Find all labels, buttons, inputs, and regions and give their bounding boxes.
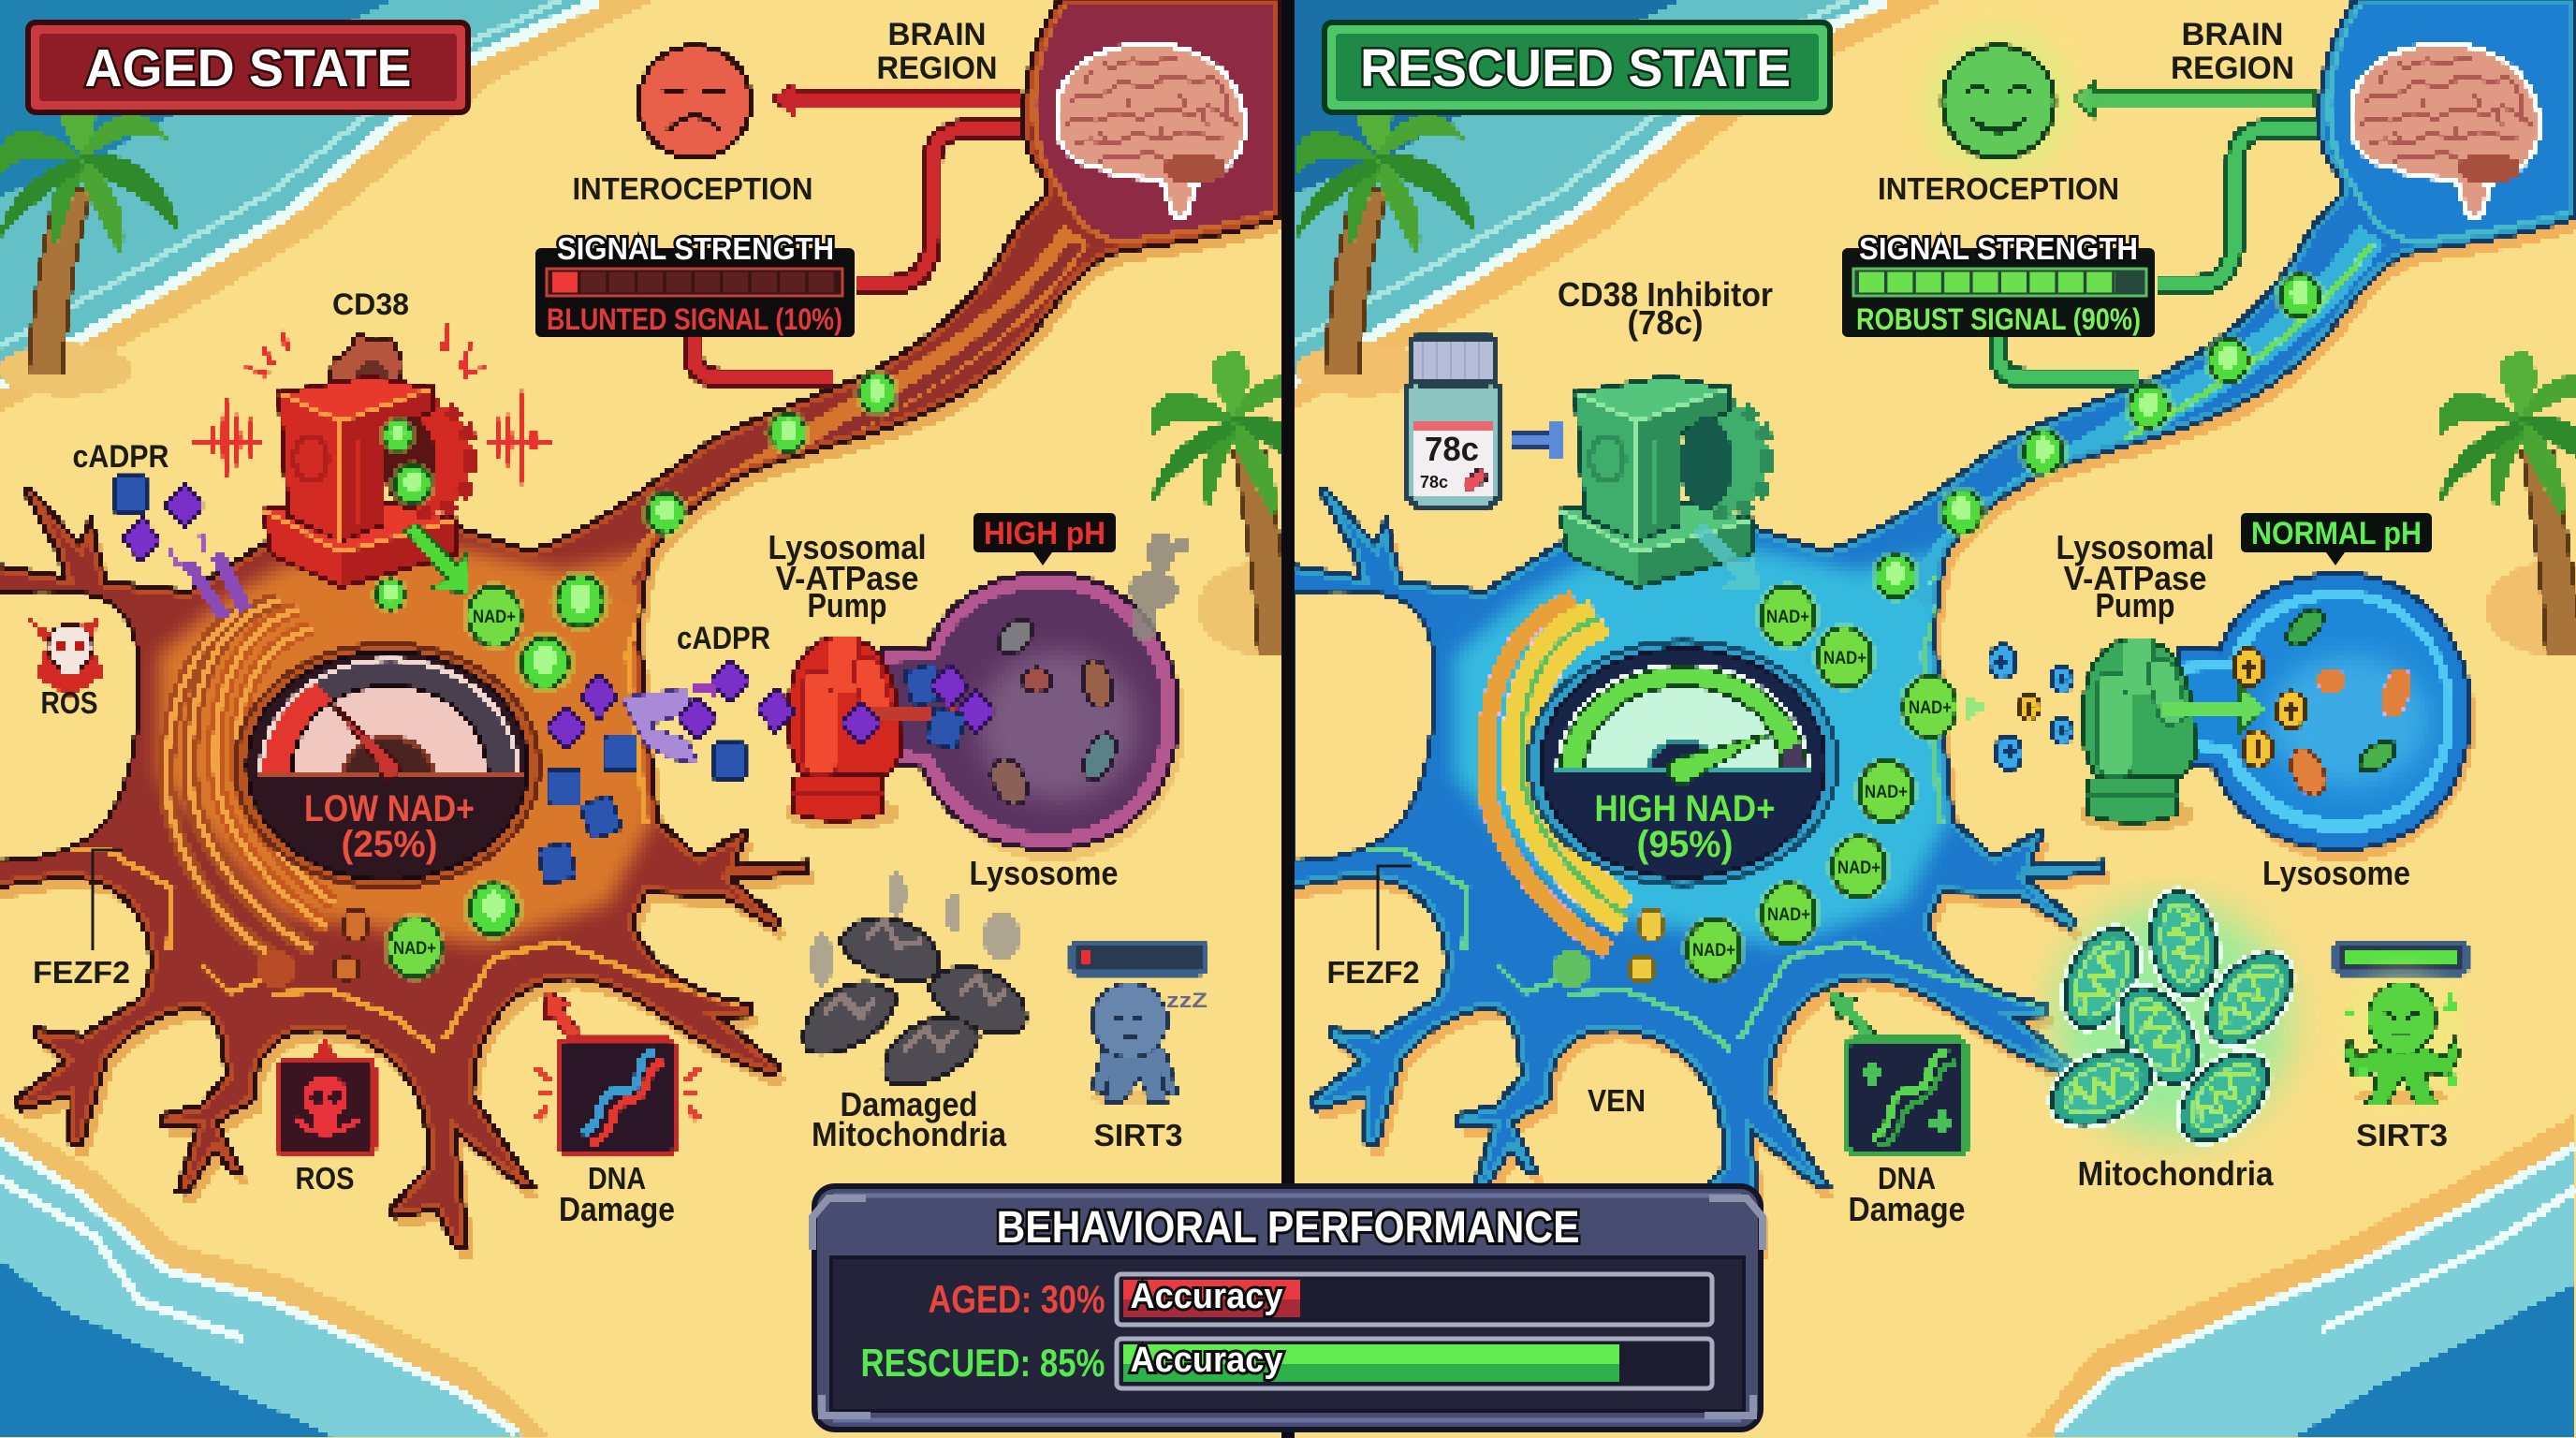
NAD+ molecules: rescued: NAD+ [1767,905,1810,925]
label: lysosomal V-ATPase pump rescued [2056,528,2215,624]
label: CD38 inhibitor: (78c) [1627,303,1704,342]
icon: 78c bottle [1407,337,1500,506]
label: damaged mitochondria: Damaged [841,1085,977,1123]
row: rescued accuracy: RESCUED: 85% [861,1341,1105,1385]
arrow: DNA damage increase [545,990,582,1041]
label: cADPR middle: cADPR [677,621,770,656]
icon: ROS box [278,1037,374,1154]
label: DNA damage rescued [1848,1161,1966,1228]
neuron: rescued [1286,0,2576,1260]
ocean: bottom left shore [0,1114,552,1438]
NAD+ molecules: rescued: NAD+ [1909,698,1952,718]
panel: aged state [0,0,1330,1438]
icons: damaged mitochondria [789,872,1039,1094]
label: lysosomal V-ATPase pump: Pump [807,586,887,624]
NAD+ molecules: aged: NAD+ [393,939,436,959]
icon: inhibition bar [1512,422,1563,459]
label: FEZF2 rescued: FEZF2 [1327,955,1419,990]
center divider [1281,0,1295,1438]
icon: DNA repaired box [1848,1039,1966,1154]
icon: DNA damage box [537,1039,697,1154]
icon: brain rescued [2350,44,2539,218]
label: ROS upper: ROS [41,685,97,720]
label: lysosomal V-ATPase pump rescued: Lysosomal [2056,528,2215,566]
arrow: CD38 consuming NAD [404,524,468,594]
callout: high pH: HIGH pH [984,516,1105,551]
label: low NAD+: LOW NAD+ [304,788,475,829]
palm tree: right rescued [2438,353,2576,655]
icons: cADPR molecules and channel [537,658,994,884]
icon: CD38 enzyme machine [263,334,472,587]
NAD+ molecules: rescued: NAD+ [1823,649,1866,668]
arrow: brain to interoception rescued [2072,82,2315,118]
label: FEZF2: FEZF2 [33,955,130,990]
row: rescued accuracy [861,1339,1712,1388]
icon: ROS skull upper [28,618,105,697]
NAD+ molecules: aged: NAD+ [473,608,516,627]
icon: strong SIRT3 [2344,972,2460,1107]
label: mitochondria: Mitochondria [2078,1154,2274,1193]
label: FEZF2 [33,850,130,990]
pump: lysosomal V-ATPase aged [784,637,900,829]
motion lines: CD38 [193,323,554,486]
gauge: low NAD+ [236,644,539,888]
label: DNA damage aged [559,1161,675,1228]
label: 25 percent: (25%) [341,824,438,865]
label: lysosomal V-ATPase pump [768,528,927,624]
label: cADPR upper: cADPR [73,439,168,475]
label: FEZF2 rescued [1327,866,1419,990]
palm tree: left [0,91,178,396]
label: CD38: CD38 [332,287,409,321]
icon: tired SIRT3 [1090,983,1208,1106]
lysosome: damaged [884,573,1186,861]
title badge: rescued state [1325,22,1830,112]
label: brain region [878,22,996,79]
icon: 78c bottle: 78c [1425,430,1479,468]
label: brain region rescued: BRAIN [2181,17,2284,52]
label: DNA damage aged: DNA [588,1161,646,1196]
arrow: brain to interoception [772,82,1020,118]
label: high NAD+: HIGH NAD+ [1595,788,1775,829]
label: lysosomal V-ATPase pump rescued: V-ATPase [2063,559,2207,597]
smoke: lysosome [1129,532,1189,643]
label: robust signal: ROBUST SIGNAL (90%) [1856,302,2141,336]
title badge: aged state: AGED STATE [84,38,412,98]
label: 95 percent: (95%) [1636,824,1734,865]
label: SIRT3 aged: SIRT3 [1093,1118,1183,1152]
icon: happy face [1925,29,2071,175]
label: DNA damage rescued: Damage [1848,1190,1966,1228]
label: lysosomal V-ATPase pump: Lysosomal [768,528,927,566]
SIRT3 level bar: high [2335,942,2466,974]
row: rescued accuracy: Accuracy [1131,1341,1282,1380]
row: aged accuracy: AGED: 30% [929,1277,1105,1321]
ocean: top left shore [0,0,655,412]
label: lysosome: Lysosome [970,854,1118,892]
arrow: DNA repair [1828,990,1878,1041]
label: lysosomal V-ATPase pump rescued: Pump [2095,586,2175,624]
label: sleeping z: zzZ [1166,989,1208,1012]
panel: behavioral performance [812,1186,1763,1430]
ocean: bottom right shore [2027,1114,2576,1438]
label: VEN: VEN [1588,1083,1646,1118]
icon: CD38 enzyme inhibited [1559,376,1768,587]
label: SIRT3 rescued: SIRT3 [2356,1118,2448,1152]
label: DNA damage rescued: DNA [1878,1161,1936,1196]
title badge: rescued state: RESCUED STATE [1360,38,1791,98]
icon: 78c bottle: 78c [1420,473,1448,492]
label: lysosome rescued: Lysosome [2262,854,2410,892]
connectors: signal lines rescued [1998,128,2317,378]
signal strength meter [535,231,855,337]
neuron: aged [0,0,1288,1260]
label: brain region rescued [2171,17,2294,86]
palm tree: right [1151,351,1281,655]
pump: lysosomal V-ATPase rescued [2079,638,2195,831]
arrow: proton flow [2162,685,2265,732]
SIRT3 level bar: low [1072,942,1204,974]
row: aged accuracy: Accuracy [1131,1277,1282,1316]
icons: cADPR molecules upper [114,477,245,618]
row: aged accuracy [929,1274,1712,1325]
lysosome: healthy [2177,574,2476,861]
callout: normal pH: NORMAL pH [2251,516,2422,551]
icons: healthy mitochondria [2034,881,2314,1164]
callout: normal pH [2241,513,2432,565]
palm tree: left rescued [1295,91,1474,396]
icon: brain [1056,44,1245,218]
NAD+ molecules: rescued: NAD+ [1766,608,1809,627]
signal strength meter rescued [1842,231,2155,337]
NAD+ molecules: aged [372,371,900,981]
label: ROS lower: ROS [296,1161,354,1196]
panel: rescued state [1286,0,2576,1438]
label: damaged mitochondria: Mitochondria [812,1115,1007,1153]
label: interoception rescued: INTEROCEPTION [1878,171,2119,206]
title badge: aged state [28,22,468,112]
NAD+ molecules: rescued [1682,271,2325,983]
label: signal strength rescued: SIGNAL STRENGTH [1859,231,2138,266]
connectors: signal lines [694,128,1022,378]
label: brain region: BRAIN [887,17,987,52]
label: brain region rescued: REGION [2171,51,2294,86]
label: CD38 inhibitor: CD38 Inhibitor [1558,275,1773,314]
NAD+ molecules: rescued: NAD+ [1865,783,1908,802]
label: DNA damage aged: Damage [559,1190,675,1228]
label: damaged mitochondria [812,1085,1007,1153]
icons: protons [1989,645,2072,770]
NAD+ molecules: rescued: NAD+ [1837,858,1881,878]
label: interoception: INTEROCEPTION [573,171,812,206]
heading: behavioral performance: BEHAVIORAL PERFORMANCE [996,1203,1580,1253]
label: CD38 inhibitor [1558,275,1773,342]
label: lysosomal V-ATPase pump: V-ATPase [775,559,919,597]
gauge: high NAD+ [1529,641,1837,885]
arrow: reduced consumption [1692,524,1760,592]
label: brain region: REGION [876,51,998,86]
icon: sad face [638,46,751,158]
label: signal strength: SIGNAL STRENGTH [557,231,834,266]
NAD+ molecules: rescued: NAD+ [1692,941,1735,961]
label: blunted signal: BLUNTED SIGNAL (10%) [547,302,842,336]
callout: high pH [973,513,1116,565]
ocean: top shore rescued [1288,0,1943,412]
